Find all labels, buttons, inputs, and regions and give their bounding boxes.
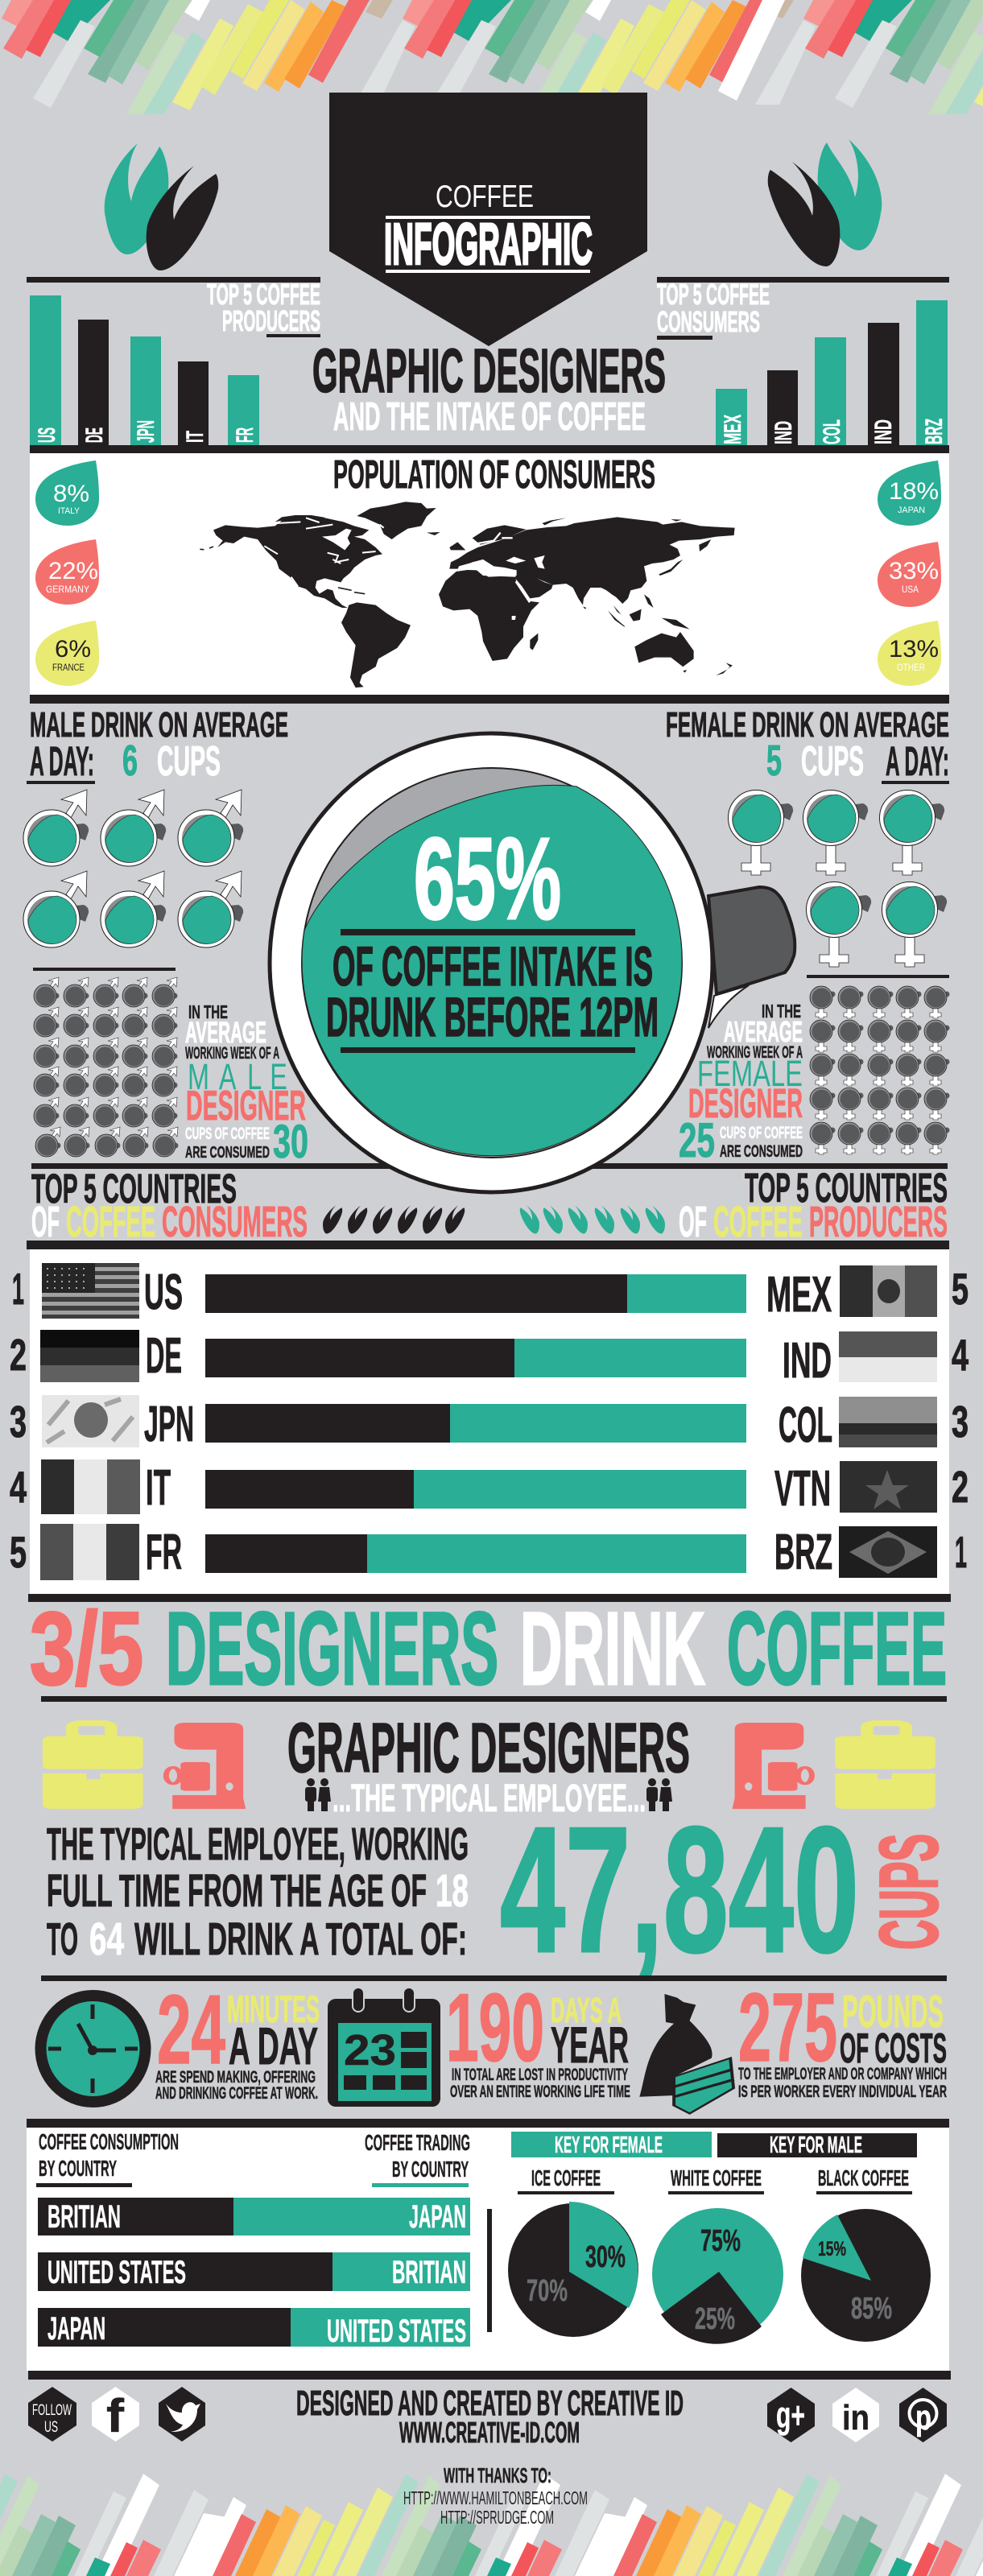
text: typical employee statement: TO <box>47 1913 78 1965</box>
heading: top 5 consumers: TOP 5 COUNTRIES <box>31 1166 237 1212</box>
big coffee cup with 65% statistic <box>270 733 795 1192</box>
country codes left: IT <box>146 1460 171 1516</box>
drop: other 13% <box>878 621 941 686</box>
thanks <box>403 2463 588 2528</box>
flag: colombia <box>839 1397 937 1447</box>
text: male designer week: WORKING WEEK OF A <box>185 1044 279 1063</box>
title banner: INFOGRAPHIC <box>384 213 593 277</box>
bar: japan vs united states <box>38 2308 470 2349</box>
key for male: KEY FOR MALE <box>770 2132 862 2158</box>
drop: japan 18%: 18% <box>889 478 939 505</box>
rank numbers left <box>10 1264 27 1577</box>
headline: 3/5 designers drink coffee: 3/5 <box>30 1591 143 1707</box>
panel: top 5 coffee producers chart: JPN <box>133 420 159 443</box>
comparison bars <box>205 1274 746 1573</box>
text: female designer week: WORKING WEEK OF A <box>707 1043 803 1062</box>
panel: top 5 coffee consumers chart: BRZ <box>921 419 948 444</box>
top colour stripes <box>2 0 983 114</box>
headline: 3/5 designers drink coffee <box>30 1591 947 1707</box>
text: typical employee statement: FULL TIME FROM THE AGE OF <box>47 1865 427 1917</box>
text: female designer week <box>679 1001 803 1167</box>
heading: graphic designers: GRAPHIC DESIGNERS <box>312 336 666 406</box>
country codes right: IND <box>783 1333 832 1389</box>
bar: united states vs britian: BRITIAN <box>392 2255 466 2290</box>
big number: 47,840 cups: CUPS <box>863 1834 955 1950</box>
world map <box>200 502 735 687</box>
heading: graphic designers the typical employee <box>287 1709 690 1820</box>
drop: germany 22%: 22% <box>48 558 98 584</box>
flag: us <box>42 1263 139 1319</box>
rank numbers right: 3 <box>952 1397 969 1447</box>
big coffee cup with 65% statistic: OF COFFEE INTAKE IS <box>332 935 653 997</box>
panel: top 5 coffee consumers chart: IND <box>870 419 897 444</box>
consumption heading: BY COUNTRY <box>39 2156 117 2181</box>
stat: 190 days a year: IN TOTAL ARE LOST IN PRODUCTIVITY <box>452 2066 628 2084</box>
bar: united states vs britian <box>38 2252 470 2291</box>
bar: britian vs japan: JAPAN <box>409 2199 466 2235</box>
pie: white coffee: WHITE COFFEE <box>671 2165 762 2190</box>
text: typical employee statement: 18 <box>436 1865 469 1917</box>
text: female designer week: 25 <box>679 1113 715 1167</box>
text: typical employee statement <box>47 1818 469 1965</box>
heading: graphic designers <box>312 336 666 439</box>
stat: 275 pounds of costs <box>738 1972 947 2101</box>
thanks: HTTP://WWW.HAMILTONBEACH.COM <box>403 2487 588 2508</box>
trading heading <box>365 2130 470 2187</box>
country codes left: US <box>144 1265 183 1320</box>
icon: pinterest hexagon: p <box>915 2398 931 2438</box>
panel: population of consumers: POPULATION OF CONSUMERS <box>333 453 655 497</box>
drop: japan 18%: JAPAN <box>898 506 925 515</box>
rank numbers right: 2 <box>952 1462 969 1512</box>
flag: japan <box>42 1395 139 1447</box>
pie: black coffee: 15% <box>818 2238 846 2260</box>
title banner: COFFEE <box>436 180 534 214</box>
icon: facebook hexagon: f <box>106 2390 125 2442</box>
flag: brazil <box>839 1526 937 1578</box>
icon: follow us hexagon: US <box>44 2419 58 2436</box>
flag: mexico <box>840 1265 937 1317</box>
female mini cup grid <box>807 975 950 1154</box>
drop: italy 8% <box>35 460 99 526</box>
pie: ice coffee <box>508 2165 638 2337</box>
text: male designer week: 30 <box>273 1116 308 1168</box>
rank numbers right <box>952 1264 969 1577</box>
pie: ice coffee: 30% <box>585 2240 626 2274</box>
panel: top 5 coffee producers chart: IT <box>182 431 209 443</box>
bar: united states vs britian: UNITED STATES <box>47 2255 186 2290</box>
icons: six black beans <box>323 1205 465 1234</box>
country codes right: MEX <box>766 1267 832 1323</box>
male mini cup grid <box>33 968 179 1157</box>
bar: japan vs united states: JAPAN <box>47 2311 105 2347</box>
title banner <box>329 93 647 346</box>
drop: usa 33% <box>878 542 941 607</box>
icon: calendar: 23 <box>344 2026 396 2074</box>
divider <box>41 1975 947 1981</box>
stat: 190 days a year: OVER AN ENTIRE WORKING LIFE TIME <box>450 2083 630 2101</box>
heading: top 5 producers <box>679 1165 948 1246</box>
rank numbers left: 4 <box>10 1462 27 1512</box>
thanks: WITH THANKS TO: <box>444 2463 551 2487</box>
consumption heading: COFFEE CONSUMPTION <box>39 2129 179 2154</box>
pie: ice coffee: 70% <box>527 2274 568 2308</box>
country codes right: COL <box>779 1397 832 1453</box>
panel: top 5 coffee producers chart: PRODUCERS <box>222 304 320 337</box>
text: typical employee statement: 64 <box>89 1913 124 1965</box>
female heading: 5 <box>766 737 782 785</box>
panel: top 5 coffee producers chart: DE <box>81 427 108 443</box>
big coffee cup with 65% statistic: 65% <box>414 814 561 943</box>
headline: 3/5 designers drink coffee: DESIGNERS <box>166 1591 498 1707</box>
stat: 190 days a year: DAYS A <box>551 1991 622 2030</box>
icons: briefcase and coffee maker left <box>43 1723 246 1809</box>
country codes left <box>144 1265 194 1580</box>
text: female designer week: IN THE <box>762 1001 801 1022</box>
big coffee cup with 65% statistic: DRUNK BEFORE 12PM <box>326 986 659 1048</box>
icon: follow us hexagon: FOLLOW <box>32 2402 72 2419</box>
country codes left: JPN <box>144 1397 194 1452</box>
male heading <box>27 705 288 785</box>
icon: coffee beans right <box>768 139 882 266</box>
female cups <box>728 791 947 967</box>
panel: top 5 coffee producers chart <box>27 277 320 445</box>
country codes right: BRZ <box>774 1525 832 1580</box>
icon: coffee beans left <box>105 143 218 270</box>
panel: population of consumers <box>30 445 949 704</box>
text: female designer week: CUPS OF COFFEE <box>720 1124 803 1142</box>
key for male <box>717 2132 917 2158</box>
flag: germany <box>40 1330 139 1382</box>
heading: top 5 producers: OF <box>679 1198 707 1246</box>
trading heading: BY COUNTRY <box>392 2157 469 2182</box>
male cups <box>23 790 243 947</box>
heading: graphic designers: AND THE INTAKE OF COFFEE <box>333 395 646 439</box>
rank numbers left: 5 <box>10 1527 27 1577</box>
panel: top 5 coffee consumers chart: MEX <box>720 415 746 444</box>
text: typical employee statement: WILL DRINK A TOTAL OF: <box>134 1913 467 1965</box>
panel: top 5 coffee producers chart: FR <box>232 427 258 443</box>
text: typical employee statement: THE TYPICAL EMPLOYEE, WORKING <box>47 1818 469 1870</box>
country codes left: FR <box>146 1525 182 1580</box>
male heading: CUPS <box>157 738 221 785</box>
trading heading: COFFEE TRADING <box>365 2130 470 2155</box>
text: female designer week: AVERAGE <box>724 1015 803 1048</box>
text: male designer week: AVERAGE <box>185 1016 266 1049</box>
drop: germany 22% <box>35 539 99 605</box>
stat: 24 minutes a day: 24 <box>157 1975 225 2084</box>
icon: google plus hexagon: g+ <box>776 2394 805 2436</box>
consumption heading <box>36 2129 179 2187</box>
icons: six teal beans <box>520 1205 665 1234</box>
icon: linkedin hexagon <box>832 2388 879 2442</box>
drop: italy 8%: 8% <box>53 481 89 507</box>
bottom colour stripes <box>0 2474 983 2576</box>
text: female designer week: FEMALE <box>697 1053 803 1094</box>
bar: britian vs japan <box>38 2198 470 2235</box>
female heading <box>666 705 949 785</box>
country codes right <box>766 1267 832 1580</box>
male heading: A DAY: <box>30 738 94 784</box>
text: male designer week <box>185 1001 308 1168</box>
drop: france 6%: 6% <box>55 636 91 663</box>
text: male designer week: CUPS OF COFFEE <box>185 1125 270 1143</box>
male heading: MALE DRINK ON AVERAGE <box>30 705 288 745</box>
divider <box>41 1696 947 1702</box>
flag: france <box>40 1524 139 1580</box>
stat: 24 minutes a day: ARE SPEND MAKING, OFFERING <box>155 2068 316 2087</box>
panel: top 5 coffee consumers chart: TOP 5 COFFEE <box>657 278 770 311</box>
pie: black coffee: 85% <box>851 2292 892 2326</box>
stat: 24 minutes a day: A DAY <box>229 2017 318 2075</box>
panel: top 5 coffee producers chart: TOP 5 COFFEE <box>207 278 320 311</box>
pie: white coffee <box>652 2165 783 2344</box>
icon: facebook hexagon <box>92 2387 139 2442</box>
stat: 24 minutes a day: AND DRINKING COFFEE AT WORK. <box>155 2084 318 2103</box>
drop: usa 33%: USA <box>902 584 919 595</box>
credits <box>296 2384 684 2449</box>
key for female <box>511 2132 712 2158</box>
rank numbers left: 2 <box>10 1330 27 1380</box>
rank numbers left: 1 <box>12 1264 24 1314</box>
thanks: HTTP://SPRUDGE.COM <box>440 2507 554 2528</box>
drop: italy 8%: ITALY <box>58 506 81 516</box>
heading: top 5 producers: COFFEE <box>713 1198 803 1246</box>
stat: 24 minutes a day <box>155 1975 320 2103</box>
drop: france 6% <box>35 621 99 686</box>
heading: top 5 consumers <box>31 1166 308 1246</box>
panel: top 5 coffee consumers chart: IND <box>770 421 797 444</box>
stat: 275 pounds of costs: 275 <box>738 1972 837 2082</box>
credits: WWW.CREATIVE-ID.COM <box>399 2416 580 2449</box>
divider under panels <box>31 1163 948 1169</box>
flag: italy <box>41 1459 140 1514</box>
flag: india <box>839 1331 937 1382</box>
panel: consumption, trading and pies <box>27 2119 951 2380</box>
icons: briefcase and coffee maker right <box>733 1723 936 1809</box>
icon: calendar <box>328 1988 440 2107</box>
pie: black coffee <box>801 2165 931 2342</box>
text: male designer week: IN THE <box>188 1001 228 1022</box>
icon: people left <box>305 1778 331 1811</box>
male heading: 6 <box>122 737 138 785</box>
country codes left: DE <box>146 1328 182 1384</box>
headline: 3/5 designers drink coffee: DRINK <box>520 1591 705 1707</box>
icon: people right <box>646 1778 672 1811</box>
pie: white coffee: 75% <box>700 2224 741 2258</box>
panel: country ranking <box>10 1241 969 1602</box>
text: female designer week: DESIGNER <box>688 1080 803 1126</box>
panel: top 5 coffee consumers chart: CONSUMERS <box>657 305 760 338</box>
flag: vietnam <box>840 1461 937 1513</box>
country codes right: VTN <box>774 1461 831 1517</box>
heading: top 5 consumers: COFFEE <box>66 1198 155 1246</box>
key for female: KEY FOR FEMALE <box>555 2132 663 2158</box>
bar: japan vs united states: UNITED STATES <box>327 2314 466 2349</box>
panel: top 5 coffee consumers chart <box>657 277 949 445</box>
heading: graphic designers the typical employee: ...THE TYPICAL EMPLOYEE... <box>332 1777 646 1820</box>
female heading: CUPS <box>801 738 864 785</box>
rank numbers left: 3 <box>10 1397 27 1447</box>
stat: 24 minutes a day: MINUTES <box>227 1988 320 2030</box>
rank numbers right: 4 <box>952 1330 969 1380</box>
rank numbers right: 5 <box>952 1264 969 1314</box>
panel: top 5 coffee consumers chart: COL <box>819 419 845 444</box>
icon: money bag <box>639 1994 733 2113</box>
icon: linkedin hexagon: in <box>842 2398 869 2438</box>
text: male designer week: MALE <box>188 1058 287 1097</box>
icon: google plus hexagon <box>767 2388 815 2442</box>
icon: clock <box>35 1990 151 2107</box>
stat: 190 days a year: 190 <box>446 1974 544 2082</box>
drop: france 6%: FRANCE <box>52 662 85 673</box>
drop: japan 18% <box>878 460 941 526</box>
rank numbers right: 1 <box>955 1527 967 1577</box>
drop: other 13%: OTHER <box>897 662 925 673</box>
bar: britian vs japan: BRITIAN <box>47 2199 121 2235</box>
pie: white coffee: 25% <box>695 2302 735 2336</box>
text: male designer week: DESIGNER <box>186 1083 306 1129</box>
text: male designer week: ARE CONSUMED <box>185 1144 270 1162</box>
panel: top 5 coffee producers chart: US <box>34 427 60 443</box>
icon: follow us hexagon <box>28 2387 76 2442</box>
drop: usa 33%: 33% <box>889 558 939 584</box>
heading: top 5 consumers: OF <box>31 1198 60 1246</box>
heading: top 5 consumers: CONSUMERS <box>162 1198 308 1246</box>
icon: twitter hexagon <box>159 2387 205 2442</box>
stat: 190 days a year: YEAR <box>551 2017 629 2074</box>
drop: germany 22%: GERMANY <box>46 584 89 595</box>
pie: ice coffee: ICE COFFEE <box>531 2165 601 2190</box>
text: female designer week: ARE CONSUMED <box>720 1142 803 1161</box>
icon: pinterest hexagon <box>899 2388 947 2442</box>
drop: other 13%: 13% <box>889 636 939 663</box>
